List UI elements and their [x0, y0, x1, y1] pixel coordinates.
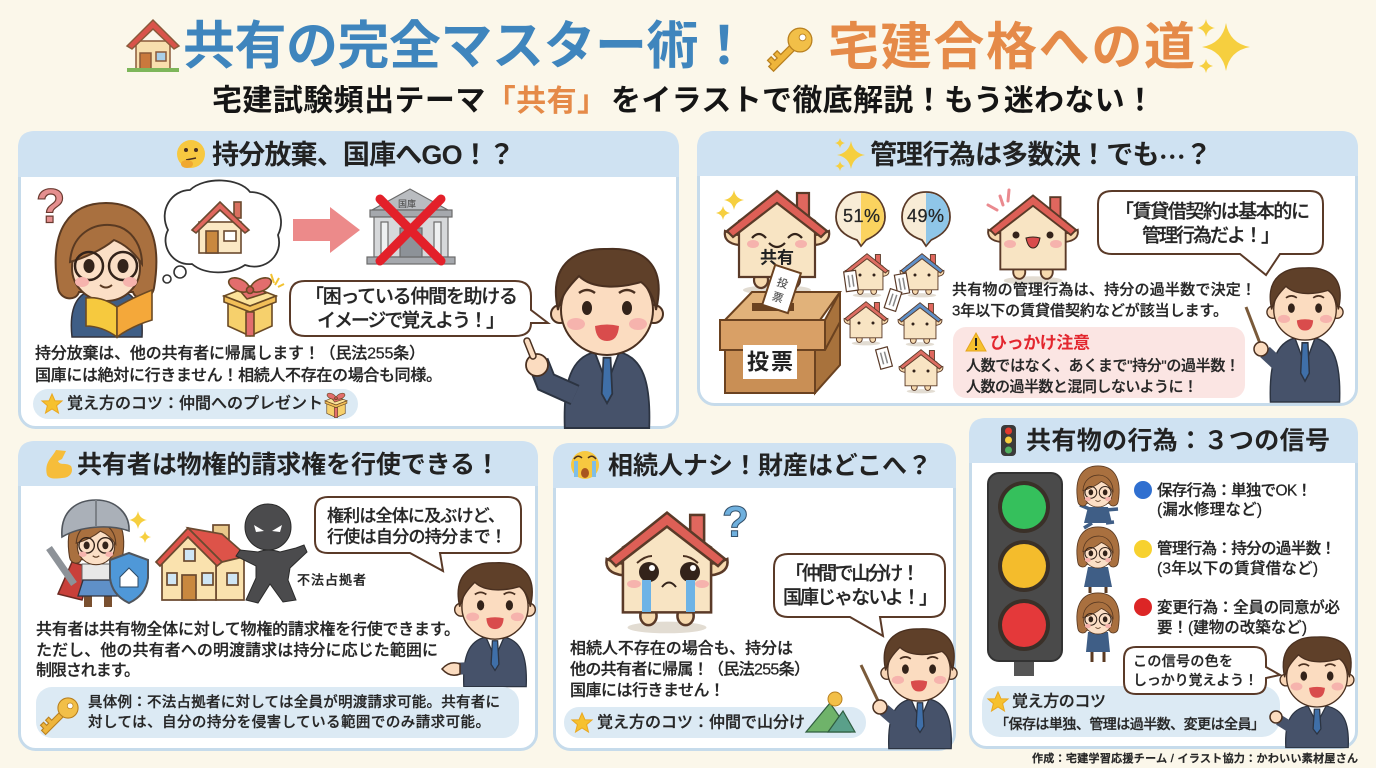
speech bubble: [290, 281, 548, 336]
panel: 相続人ナシ: [553, 443, 957, 750]
speech bubble: 「仲間で山分け！: [785, 562, 920, 584]
tip pill: [564, 692, 866, 738]
illustration: man smiling: [1270, 637, 1354, 748]
heading: 共有物の行為：３つの信号: [1026, 427, 1330, 455]
text block: 共有物の管理行為は、持分の過半数で決定！: [952, 280, 1256, 298]
illustration: crying house: [606, 513, 728, 633]
item: 管理行為: (3年以下の賃貸借など): [1157, 560, 1318, 578]
text block: 相続人不存在の場合も、持分は: [570, 640, 793, 658]
footer credit: 作成：宅建学習応援チーム / イラスト協力：かわいい素材屋さん: [1032, 751, 1358, 765]
speech bubble: [774, 554, 945, 636]
heading: 共有者は物権的請求権を行使できる！: [77, 451, 500, 479]
heading: 相続人ナシ！財産はどこへ？: [608, 452, 932, 480]
chart: 51%: 51%: [843, 206, 880, 226]
illustration: ballot box: 投: [775, 275, 790, 291]
icon: mountains with coin: [806, 692, 855, 732]
illustration: smiling house: [988, 190, 1078, 285]
panel: 物権的請求権: [18, 441, 538, 750]
speech bubble: 「困っている仲間を助ける: [305, 286, 518, 308]
illustration: girl running: [1077, 466, 1119, 528]
heading: 管理行為は多数決！でも…？: [870, 136, 1212, 174]
chart: 49%: 49%: [907, 206, 944, 226]
tip pill: [33, 389, 358, 419]
illustration: 共有 house: 共有: [760, 248, 794, 268]
illustration: girl with arms crossed: [1077, 593, 1119, 662]
icon: key: [765, 28, 812, 71]
illustration: ballot box: [720, 265, 840, 393]
warning callout: ひっかけ注意: [990, 334, 1090, 352]
arrow: [293, 207, 360, 253]
warning callout: [953, 327, 1245, 398]
title: 共有の完全マスター術！: [183, 18, 750, 76]
chart: 49%: [902, 192, 950, 246]
subtitle: をイラストで徹底解説！もう迷わない！: [611, 84, 1155, 118]
icon: question mark: ?: [36, 180, 65, 234]
text block: [570, 640, 810, 700]
icon: gift: [224, 274, 284, 336]
panel: 3つの信号: [969, 418, 1358, 748]
speech bubble: 管理行為だよ！」: [1142, 224, 1280, 246]
example pill: 対しては、自分の持分を侵害している範囲でのみ請求可能。: [88, 713, 490, 731]
illustration: ballot box: 投票: [747, 350, 793, 374]
illustration: girl reading: [56, 203, 156, 337]
sparkles: [716, 190, 744, 220]
title: [127, 18, 1250, 76]
item: 変更行為: 変更行為：全員の同意が必: [1157, 598, 1340, 616]
tip pill: 覚え方のコツ: [1012, 692, 1106, 710]
illustration: man pointing: [526, 249, 663, 428]
text block: 持分放棄は、他の共有者に帰属します！（民法255条）: [35, 344, 425, 362]
warning callout: 人数ではなく、あくまで"持分"の過半数！: [966, 358, 1240, 374]
example pill: [36, 687, 519, 738]
tip pill: 覚え方のコツ：仲間へのプレゼント: [67, 394, 323, 412]
panel: 持分放棄: [18, 131, 679, 428]
icon: sparkles: [1197, 19, 1250, 73]
speech bubble: [1124, 647, 1280, 694]
icon: house: [127, 20, 179, 72]
speech bubble: しっかり覚えよう！: [1133, 672, 1258, 688]
illustration: man presenting: [442, 563, 535, 687]
subtitle: 宅建試験頻出テーマ「共有」: [212, 84, 607, 118]
speech bubble: 国庫じゃないよ！」: [783, 586, 938, 608]
item: 管理行為: 管理行為：持分の過半数！: [1157, 540, 1336, 558]
illustration: 共有 house: [725, 191, 829, 295]
item: 管理行為: [1134, 540, 1336, 578]
speech bubble: 権利は全体に及ぶけど、: [327, 506, 505, 526]
speech bubble: イメージで覚えよう！」: [317, 310, 505, 332]
text block: 国庫には行きません！: [570, 682, 725, 700]
heading: 持分放棄、国庫へGO！？: [212, 140, 515, 170]
illustration: man with pointer: [861, 629, 957, 749]
speech bubble: この信号の色を: [1133, 653, 1233, 669]
text block: 他の共有者に帰属！（民法255条）: [570, 660, 810, 678]
speech bubble: [1098, 191, 1323, 275]
speech bubble: 「賃貸借契約は基本的に: [1115, 200, 1310, 222]
text block: [35, 344, 442, 384]
text block: 国庫には絶対に行きません！相続人不存在の場合も同様。: [35, 366, 442, 384]
illustration: small houses voting: [844, 254, 944, 393]
item: 保存行為: (漏水修理など): [1157, 500, 1262, 518]
illustration: house: [156, 525, 247, 600]
tip pill: 覚え方のコツ：仲間で山分け: [597, 714, 805, 732]
item: 変更行為: 要！(建物の改築など): [1157, 618, 1307, 636]
example pill: 具体例：不法占拠者に対しては全員が明渡請求可能。共有者に: [88, 693, 500, 711]
illustration: knight girl: [49, 500, 151, 607]
tip pill: 「保存は単独、管理は過半数、変更は全員」: [995, 716, 1265, 732]
chart: 51%: [836, 192, 885, 246]
illustration: traffic light: [988, 473, 1062, 676]
item: 変更行為: [1134, 598, 1340, 636]
item: 保存行為: 保存行為：単独でOK！: [1157, 482, 1312, 500]
illustration: squatter: [236, 504, 307, 603]
title: 宅建合格への道: [828, 18, 1195, 76]
text block: [36, 620, 460, 680]
subtitle: [212, 84, 1155, 118]
speech bubble: [315, 497, 521, 571]
thought cloud: [163, 180, 281, 283]
text block: ただし、他の共有者への明渡請求は持分に応じた範囲に: [36, 642, 438, 660]
text block: 共有者は共有物全体に対して物権的請求権を行使できます。: [36, 620, 460, 638]
text block: 制限されます。: [36, 662, 140, 680]
icon: question mark: ?: [722, 498, 749, 546]
illustration: ballot box: 票: [770, 290, 785, 306]
illustration: girl walking: [1077, 527, 1119, 593]
warning callout: 人数の過半数と混同しないように！: [966, 378, 1198, 396]
illustration: 国庫 bank with cross: [367, 189, 455, 264]
illustration: man with pointer: [1246, 268, 1343, 402]
label: 不法占拠者: 不法占拠者: [297, 572, 366, 588]
panel: 管理行為: [697, 131, 1358, 404]
item: 保存行為: [1134, 481, 1312, 518]
icon: warning: [966, 333, 986, 351]
text block: [952, 280, 1256, 320]
tip pill: [982, 686, 1280, 737]
illustration: 国庫 bank with cross: 国庫: [398, 198, 416, 209]
speech bubble: 行使は自分の持分まで！: [327, 528, 507, 546]
text block: 3年以下の賃貸借契約などが該当します。: [952, 302, 1228, 320]
